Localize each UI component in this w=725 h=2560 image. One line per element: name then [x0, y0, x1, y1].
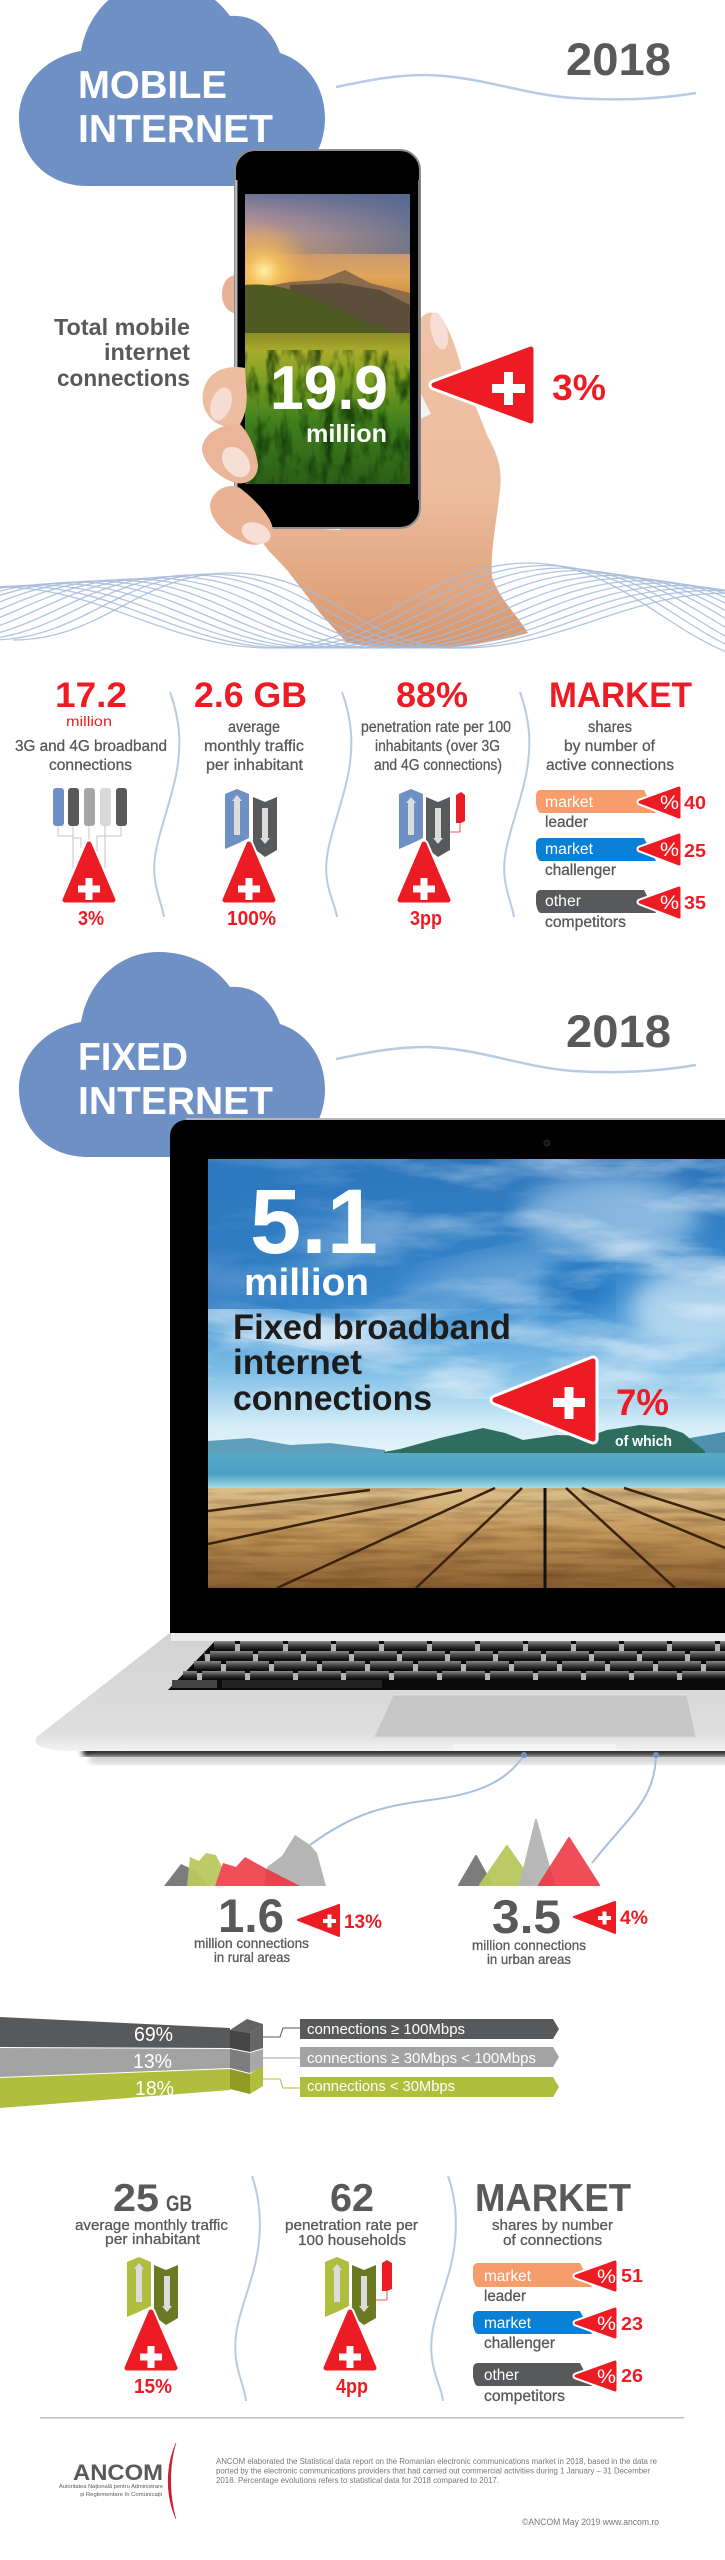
heading: mobile internet: MOBILE [78, 64, 227, 107]
panel: market shares mobile: MARKET [549, 676, 692, 715]
market row: leader 51: leader [484, 2288, 526, 2305]
bar segment: 18% [0, 2069, 230, 2108]
market row: challenger 23: market [484, 2315, 532, 2332]
stat: 88% penetration rate: and 4G connections) [374, 757, 502, 774]
market row: challenger 25: market [545, 841, 594, 858]
growth badge: plus 3% [434, 349, 606, 421]
label: total mobile internet connections: internet [104, 339, 190, 365]
icon: five connection bars [53, 788, 127, 868]
panel: market shares fixed: shares by number [492, 2217, 613, 2234]
market row: leader 51: % [597, 2267, 616, 2288]
stat: 25 GB monthly traffic: 25 [113, 2177, 159, 2220]
market row: other competitors 35: competitors [545, 914, 626, 931]
panel: market shares mobile [536, 676, 706, 931]
footer: methodology note [216, 2457, 658, 2485]
icon: growth triangle [326, 2312, 374, 2368]
market row: other competitors 26 [473, 2362, 643, 2405]
bar segment: 18%: 18% [135, 2078, 174, 2100]
connector lines from laptop to area charts [310, 1752, 659, 1863]
stat: 62 penetration rate: penetration rate per [285, 2217, 418, 2234]
stat: 88% penetration rate: 3pp [410, 908, 442, 930]
market row: leader 51: market [484, 2268, 532, 2285]
market row: leader 51: 51 [621, 2266, 643, 2286]
footer: methodology note: 2018. Percentage evolutions refers to statistical data for 2018 compared to 2017. [216, 2476, 499, 2485]
growth badge: plus 13% [298, 1905, 382, 1936]
wave line band [0, 563, 725, 665]
stat: 2.6 GB monthly traffic: monthly traffic [204, 738, 304, 755]
legend: connections at least 100Mbps: connections ≥ 100Mbps [307, 2021, 465, 2038]
market row: leader 51 [473, 2262, 643, 2305]
stat: 25 GB monthly traffic [75, 2177, 229, 2398]
stat: rural connections: 1.6 [218, 1889, 284, 1942]
laptop lid [170, 1120, 725, 1633]
stat: 2.6 GB monthly traffic: per inhabitant [206, 757, 304, 774]
label: fixed broadband internet connections: Fixed broadband [233, 1308, 511, 1347]
stat: rural connections: million connections [194, 1935, 309, 1951]
market row: leader 40: leader [545, 814, 588, 831]
heading: fixed internet: INTERNET [78, 1080, 273, 1123]
icon: upload and download banners [225, 789, 277, 857]
icon: banners and red bar [325, 2257, 392, 2325]
stat: 88% penetration rate: penetration rate per 100 [361, 719, 511, 736]
market row: challenger 25: challenger [545, 862, 616, 879]
stat: 25 GB monthly traffic: average monthly traffic [75, 2217, 229, 2234]
footer: methodology note: ported by the electronic communications providers that had carried out commercial activities during 1 January – 31 December [216, 2466, 650, 2476]
market row: challenger 25: % [660, 840, 679, 861]
panel: fixed internet section [19, 952, 725, 1764]
growth badge: plus 7% of which: of which [615, 1433, 672, 1450]
stacked cube [230, 2019, 263, 2094]
cloud: mobile internet heading background [19, 0, 325, 186]
stat: rural connections: in rural areas [214, 1949, 290, 1965]
phone screen landscape [245, 194, 410, 484]
bar segment: 69% [0, 2017, 230, 2048]
market row: other competitors 26: 26 [621, 2366, 643, 2386]
market row: challenger 25: 25 [684, 841, 706, 861]
panel: market shares mobile: by number of [564, 738, 656, 755]
panel: market shares fixed: of connections [503, 2232, 602, 2249]
value: 5.1 million: 5.1 [250, 1171, 378, 1273]
market row: other competitors 26: competitors [484, 2388, 565, 2405]
icon: growth triangle [65, 844, 113, 900]
stat: rural connections [164, 1835, 382, 1965]
bar segment: 69%: 69% [134, 2024, 173, 2046]
growth badge: plus 3%: 3% [552, 367, 606, 408]
icon: upload and download banners [127, 2257, 178, 2325]
illustration: hand holding phone [202, 150, 528, 648]
stat: 88% penetration rate [361, 676, 511, 930]
stat: 17.2 million broadband connections: 3% [78, 908, 104, 930]
bar segment: 13%: 13% [133, 2051, 172, 2073]
stat: 62 penetration rate [285, 2177, 418, 2398]
stat: 2.6 GB monthly traffic: 100% [227, 908, 276, 930]
stat: urban connections: million connections [472, 1937, 586, 1953]
label: fixed broadband internet connections: connections [233, 1379, 432, 1418]
growth badge: plus 13%: 13% [344, 1912, 382, 1933]
footer: ANCOM logo: ANCOM [73, 2460, 163, 2485]
stat: 2.6 GB monthly traffic: 2.6 GB [194, 676, 307, 715]
label: total mobile internet connections: Total mobile [54, 314, 190, 340]
panel: mobile internet section [0, 0, 725, 665]
heading: mobile internet [78, 64, 273, 151]
panel: market shares mobile: active connections [546, 757, 674, 774]
value: 5.1 million: million [244, 1262, 369, 1304]
stat: urban connections: in urban areas [487, 1951, 571, 1967]
icon: growth triangle [400, 844, 448, 900]
growth badge: plus 4% [574, 1902, 648, 1933]
market row: challenger 23: challenger [484, 2335, 555, 2352]
market row: other competitors 26: % [597, 2367, 616, 2388]
stat: urban connections: 3.5 [492, 1890, 561, 1943]
market row: challenger 25 [536, 835, 706, 879]
stat: 17.2 million broadband connections: 3G and 4G broadband [15, 738, 167, 755]
bar segment: 13% [0, 2048, 230, 2077]
value: 19.9 million: 19.9 [270, 354, 388, 423]
laptop screen landscape [189, 1159, 725, 1588]
year 2018: 2018 [566, 34, 671, 85]
icon: growth triangle [127, 2312, 175, 2368]
market row: other competitors 35: 35 [684, 893, 706, 913]
stat: 62 penetration rate: 100 households [298, 2232, 406, 2249]
illustration: laptop [35, 1119, 725, 1764]
growth badge: plus 7% of which [495, 1361, 672, 1450]
stat: 25 GB monthly traffic: GB [166, 2191, 192, 2216]
chart: connection speed distribution [0, 2017, 559, 2108]
market row: leader 40 [536, 788, 706, 831]
stat: urban connections [459, 1820, 648, 1967]
stat: 2.6 GB monthly traffic: average [228, 719, 280, 736]
stat: 17.2 million broadband connections: 17.2 [55, 676, 127, 715]
heading: fixed internet: FIXED [78, 1036, 188, 1079]
icon: banners and red bar [399, 789, 465, 857]
market row: challenger 23 [473, 2309, 643, 2352]
laptop base [35, 1632, 725, 1764]
smartphone [214, 150, 420, 528]
legend: connections under 30Mbps [300, 2077, 559, 2097]
panel: market shares fixed [473, 2177, 643, 2405]
stat: 25 GB monthly traffic: per inhabitant [105, 2231, 201, 2248]
label: fixed broadband internet connections: internet [233, 1343, 362, 1382]
value: 19.9 million: million [306, 420, 387, 448]
market row: leader 40: % [660, 793, 679, 814]
market row: other competitors 26: other [484, 2367, 519, 2384]
stat: 62 penetration rate: 62 [330, 2177, 374, 2220]
icon: growth triangle [225, 844, 273, 900]
stat: 88% penetration rate: inhabitants (over 3G [375, 738, 500, 755]
stat: 88% penetration rate: 88% [396, 676, 468, 715]
footer: copyright: ©ANCOM May 2019 www.ancom.ro [522, 2517, 659, 2527]
market row: challenger 23: % [597, 2314, 616, 2335]
legend: connections at least 100Mbps [300, 2019, 559, 2039]
stat: 2.6 GB monthly traffic [194, 676, 307, 930]
label: fixed broadband internet connections [233, 1308, 511, 1418]
icon: urban mountains [459, 1820, 599, 1885]
market row: other competitors 35: other [545, 893, 581, 910]
stat: 62 penetration rate: 4pp [336, 2376, 368, 2398]
panel: market shares mobile: shares [588, 719, 632, 736]
legend: connections under 30Mbps: connections < 30Mbps [307, 2078, 455, 2095]
footer: ANCOM logo: Autoritatea Națională pentru Administrare [59, 2484, 163, 2490]
stat: 17.2 million broadband connections [15, 676, 167, 930]
market row: leader 40: market [545, 794, 594, 811]
market row: challenger 23: 23 [621, 2314, 643, 2334]
market row: other competitors 35: % [660, 893, 679, 914]
footer: methodology note: ANCOM elaborated the Statistical data report on the Romanian electronic communications market in 2018, based in the data re [216, 2457, 658, 2466]
footer: ANCOM logo [59, 2443, 176, 2519]
year 2018: 2018 [566, 1006, 671, 1057]
market row: other competitors 35 [536, 888, 706, 931]
footer: ANCOM logo: și Reglementare în Comunicații [80, 2492, 162, 2498]
stat: 25 GB monthly traffic: 15% [134, 2376, 172, 2398]
stat: 17.2 million broadband connections: million [66, 713, 112, 729]
heading: fixed internet [78, 1036, 273, 1123]
legend: connections 30 to 100Mbps: connections ≥ 30Mbps < 100Mbps [307, 2050, 536, 2067]
heading: mobile internet: INTERNET [78, 108, 273, 151]
market row: leader 40: 40 [684, 793, 706, 813]
cloud: fixed internet heading background [19, 952, 325, 1157]
icon: rural mountains [164, 1835, 326, 1886]
label: total mobile internet connections: connections [57, 365, 190, 391]
panel: market shares fixed: MARKET [475, 2177, 631, 2220]
label: total mobile internet connections [54, 314, 190, 391]
stat: 17.2 million broadband connections: connections [49, 757, 132, 774]
growth badge: plus 7% of which: 7% [616, 1382, 669, 1423]
growth badge: plus 4%: 4% [620, 1908, 648, 1929]
